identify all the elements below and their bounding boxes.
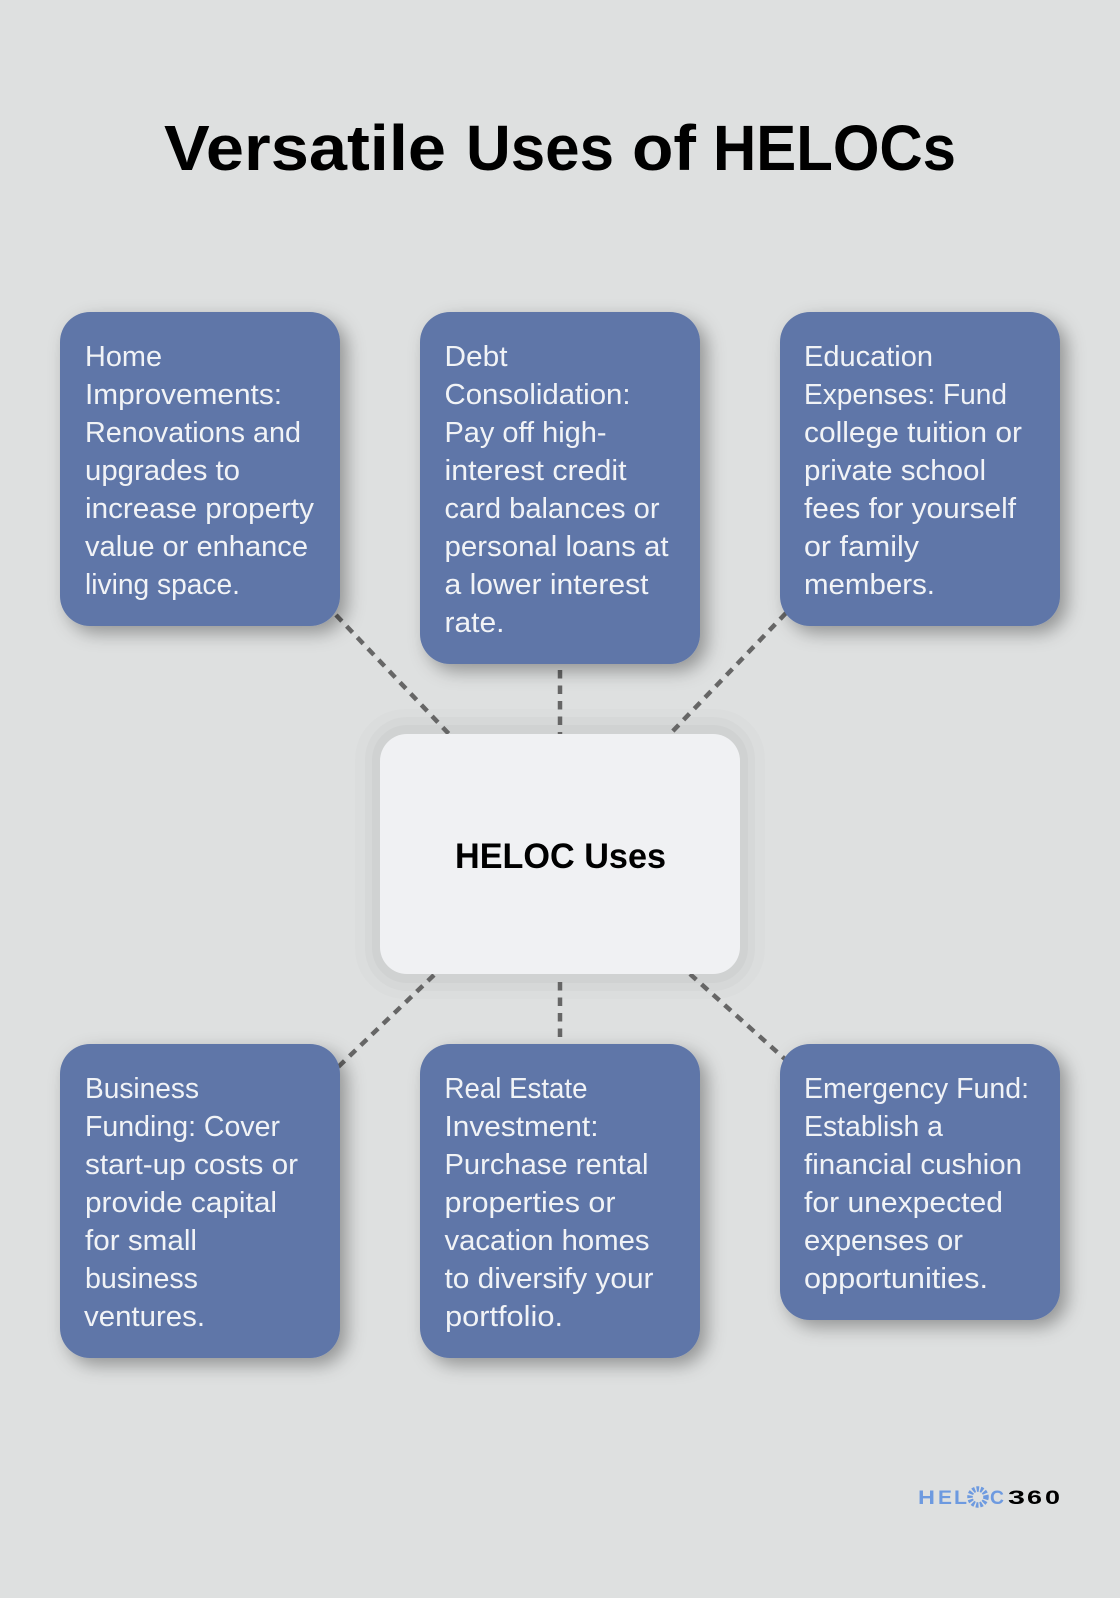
card: debt consolidation: personal loans at — [444, 531, 669, 563]
card: debt consolidation: card balances or — [444, 493, 660, 525]
card: business funding: ventures. — [84, 1301, 205, 1333]
logo: HELOC360 — [918, 1488, 1060, 1509]
center card: HELOC Uses: HELOC Uses — [455, 837, 666, 876]
logo: HELOC360: 3 — [1008, 1488, 1025, 1509]
card: business funding: provide capital — [85, 1187, 277, 1219]
card: business funding: business — [85, 1263, 198, 1295]
card: real estate investment: Investment: — [444, 1111, 598, 1143]
title: Uses — [466, 112, 614, 184]
card: real estate investment: Real Estate — [444, 1073, 588, 1105]
card: real estate investment: portfolio. — [445, 1301, 563, 1333]
card: education expenses: or family — [804, 531, 920, 563]
card: business funding: Business — [85, 1073, 199, 1105]
card: home improvements: living space. — [85, 569, 240, 601]
card: business funding: start-up costs or — [85, 1149, 299, 1181]
connector lines — [336, 613, 786, 1069]
title: of — [632, 112, 697, 184]
card: emergency fund: Emergency Fund: — [804, 1073, 1029, 1105]
card: home improvements: Home — [85, 341, 162, 373]
card: education expenses — [780, 312, 1060, 626]
card: emergency fund: for unexpected — [804, 1187, 1003, 1219]
card: education expenses: college tuition or — [804, 417, 1023, 449]
card: debt consolidation: Consolidation: — [444, 379, 630, 411]
card: emergency fund: financial cushion — [804, 1149, 1022, 1181]
logo: HELOC360: E — [938, 1488, 952, 1509]
card: real estate investment: properties or — [444, 1187, 616, 1219]
card: real estate investment — [420, 1044, 700, 1358]
card: home improvements: value or enhance — [85, 531, 308, 563]
center card: HELOC Uses — [380, 734, 740, 974]
card: home improvements: increase property — [85, 493, 315, 525]
card: education expenses: Expenses: Fund — [804, 379, 1007, 411]
logo: HELOC360: L — [954, 1488, 967, 1509]
center card glow — [355, 709, 765, 999]
card: education expenses: private school — [804, 455, 986, 487]
card: business funding — [60, 1044, 340, 1358]
card: home improvements — [60, 312, 340, 626]
card: emergency fund: opportunities. — [804, 1263, 988, 1295]
card: home improvements: Improvements: — [85, 379, 282, 411]
title: HELOCs — [713, 112, 956, 184]
card: debt consolidation: a lower interest — [444, 569, 649, 601]
card: home improvements: upgrades to — [85, 455, 240, 487]
logo: HELOC360: H — [918, 1488, 935, 1509]
logo: HELOC360: 0 — [1045, 1488, 1060, 1509]
title: Versatile — [164, 112, 446, 184]
card: real estate investment: Purchase rental — [444, 1149, 648, 1181]
card: debt consolidation: interest credit — [444, 455, 627, 487]
card: education expenses: fees for yourself — [804, 493, 1016, 525]
logo: HELOC360: 6 — [1027, 1488, 1042, 1509]
card: home improvements: Renovations and — [85, 417, 301, 449]
card: debt consolidation: Debt — [444, 341, 508, 373]
card: real estate investment: vacation homes — [444, 1225, 650, 1257]
title — [164, 112, 956, 184]
card: debt consolidation — [420, 312, 700, 664]
card: debt consolidation: rate. — [444, 607, 504, 639]
card: emergency fund: expenses or — [804, 1225, 964, 1257]
card: education expenses: Education — [804, 341, 933, 373]
card: debt consolidation: Pay off high- — [444, 417, 606, 449]
card: business funding: Funding: Cover — [85, 1111, 281, 1143]
card: real estate investment: to diversify your — [444, 1263, 654, 1295]
logo: HELOC360: C — [990, 1488, 1004, 1509]
card: business funding: for small — [85, 1225, 197, 1257]
card: emergency fund: Establish a — [804, 1111, 943, 1143]
card: education expenses: members. — [804, 569, 935, 601]
card: emergency fund — [780, 1044, 1060, 1320]
